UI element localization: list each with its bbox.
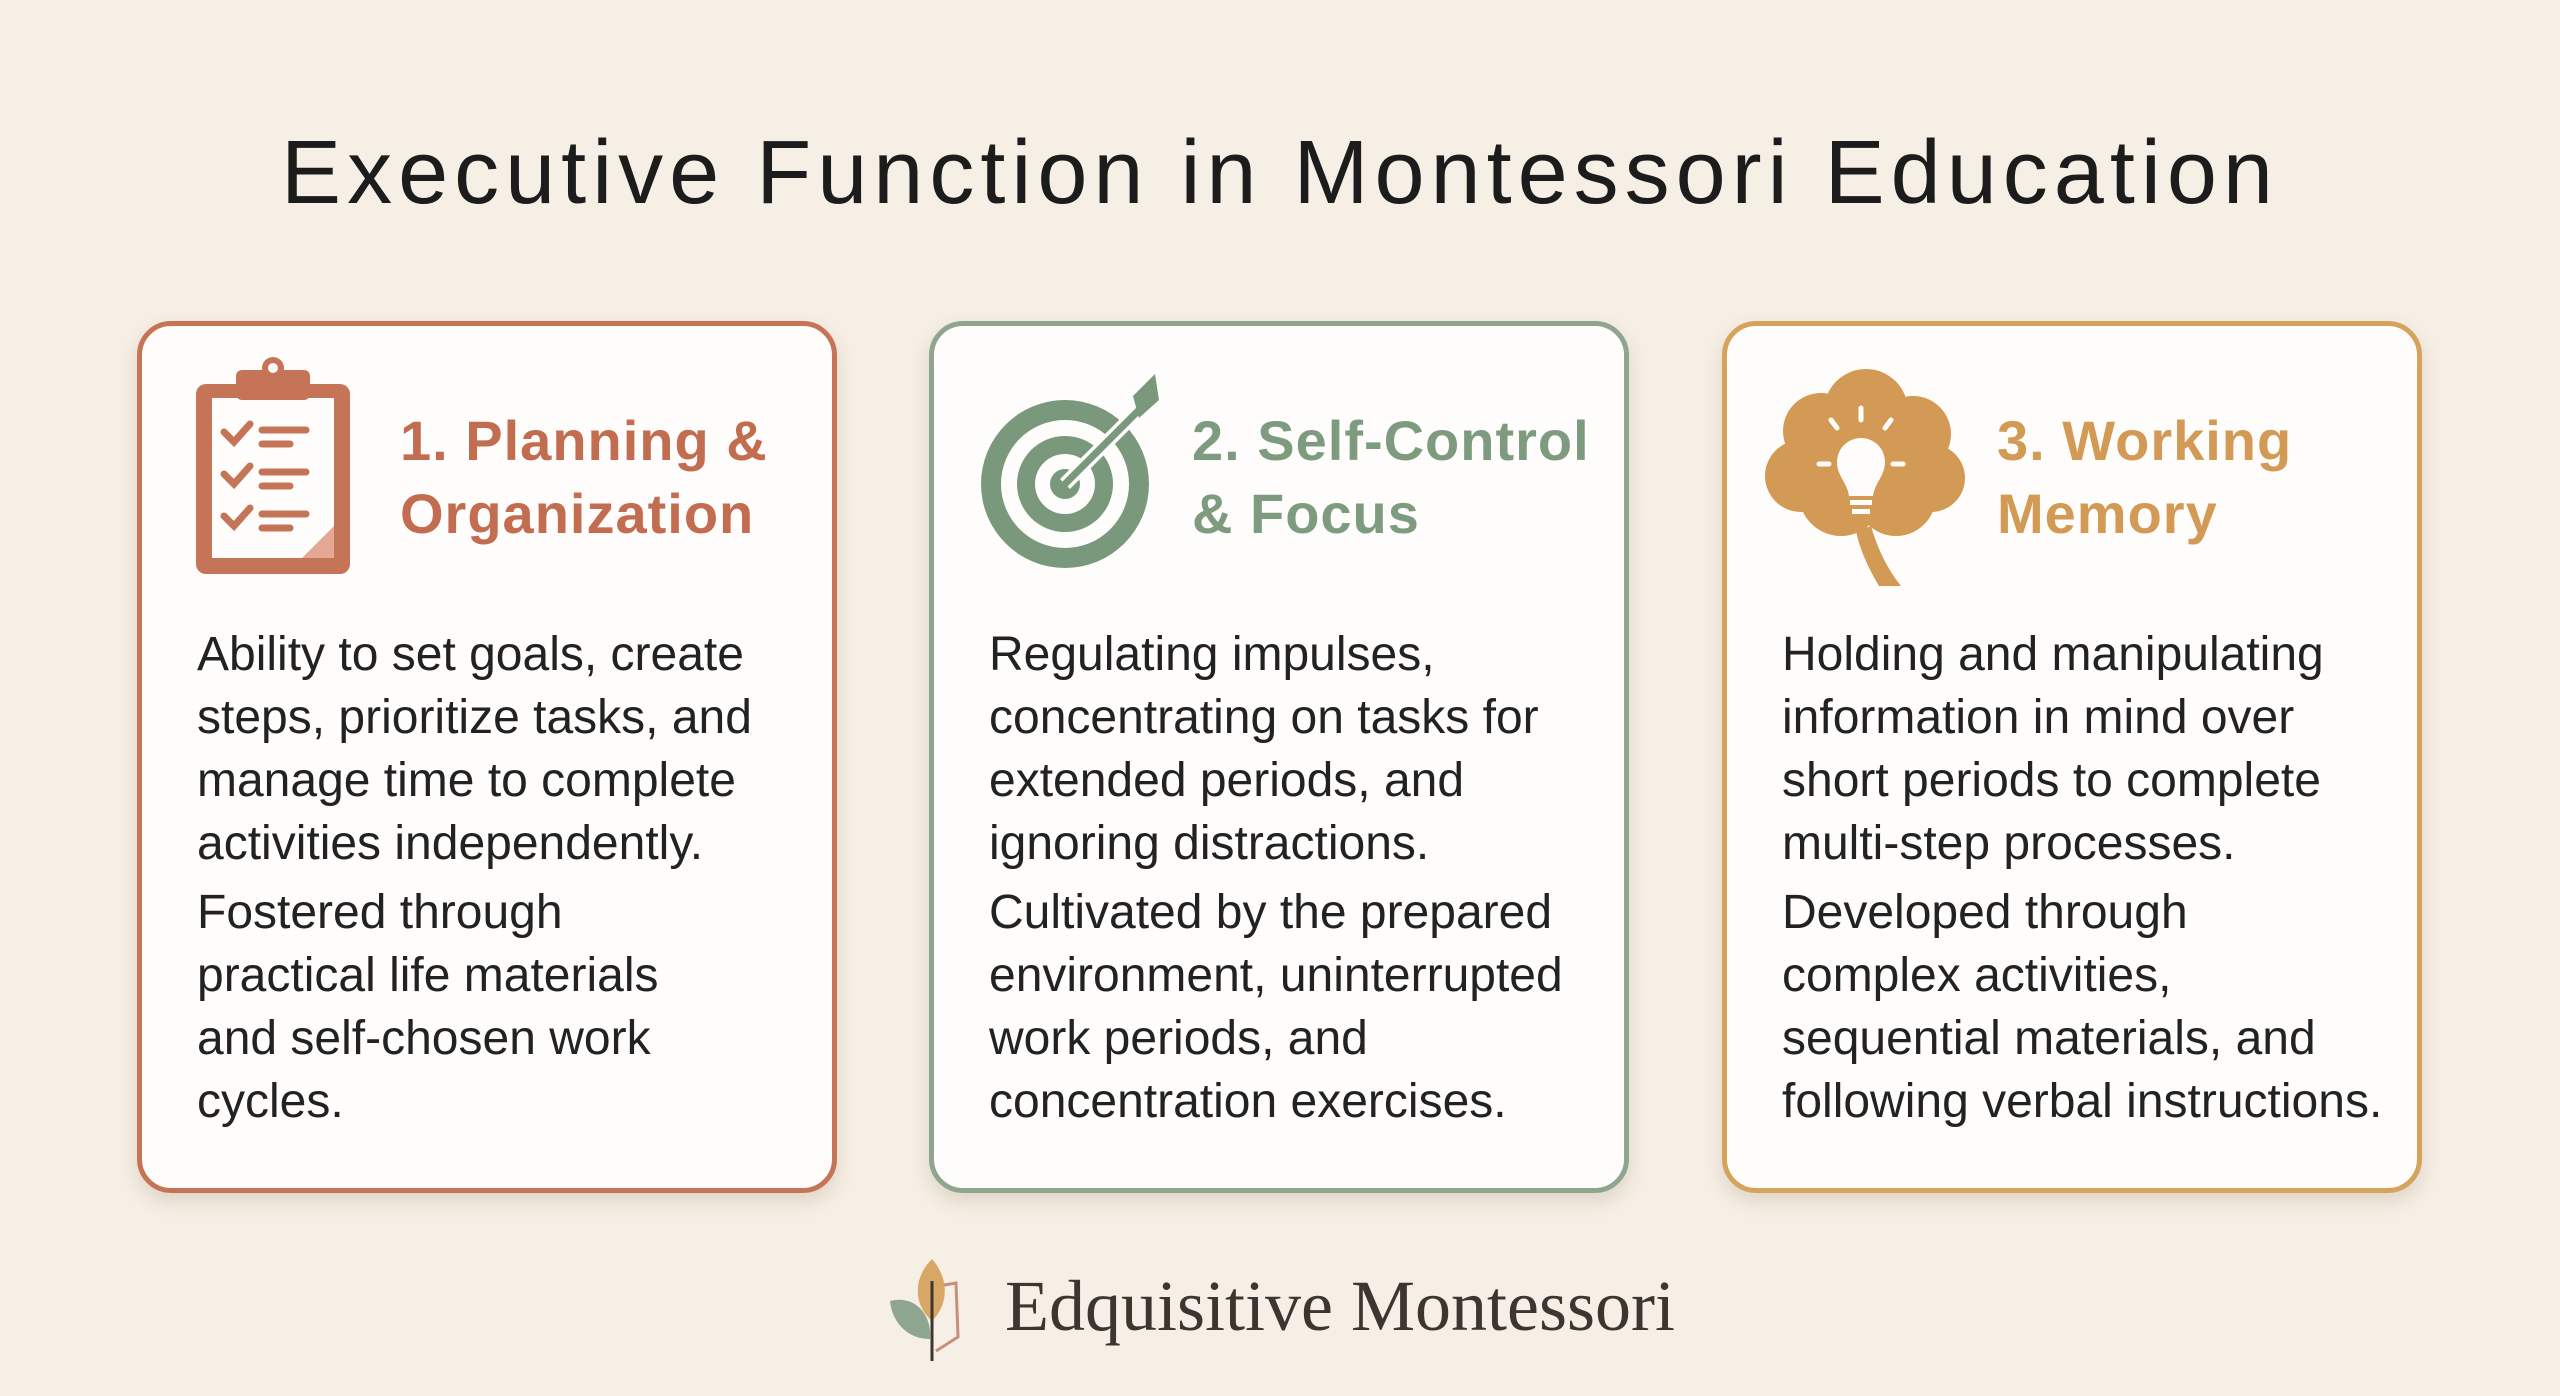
text block: environment, uninterrupted — [989, 949, 1563, 1002]
heading: & Focus — [1192, 482, 1420, 545]
text block: activities independently. — [197, 817, 703, 870]
text block: work periods, and — [989, 1012, 1368, 1065]
heading — [1997, 409, 2292, 545]
text block: multi-step processes. — [1782, 817, 2236, 870]
text block: short periods to complete — [1782, 754, 2321, 807]
text block: extended periods, and — [989, 754, 1464, 807]
heading: Organization — [400, 482, 754, 545]
title: Executive Function in Montessori Education — [281, 123, 2279, 223]
heading: 1. Planning & — [400, 409, 768, 472]
text block: cycles. — [197, 1075, 344, 1128]
text block: Holding and manipulating — [1782, 628, 2324, 681]
text block: Fostered through — [197, 886, 563, 939]
heading: 3. Working — [1997, 409, 2292, 472]
heading — [1192, 409, 1590, 545]
text block: following verbal instructions. — [1782, 1075, 2382, 1128]
heading — [400, 409, 768, 545]
heading: Memory — [1997, 482, 2218, 545]
icon: logo leaf and book — [890, 1259, 960, 1361]
text block — [989, 628, 1563, 1128]
text block: information in mind over — [1782, 691, 2294, 744]
text block: Cultivated by the prepared — [989, 886, 1552, 939]
text block: ignoring distractions. — [989, 817, 1429, 870]
panel: working memory — [1722, 321, 2422, 1193]
text block: Developed through — [1782, 886, 2188, 939]
text block: practical life materials — [197, 949, 658, 1002]
text block: Regulating impulses, — [989, 628, 1435, 681]
footer brand: Edquisitive Montessori — [1005, 1266, 1675, 1346]
text block — [197, 628, 752, 1128]
text block: concentration exercises. — [989, 1075, 1507, 1128]
panel: self-control & focus — [929, 321, 1629, 1193]
panel: planning & organization — [137, 321, 837, 1193]
heading: 2. Self-Control — [1192, 409, 1590, 472]
text block: steps, prioritize tasks, and — [197, 691, 752, 744]
icon: brain with lightbulb — [1765, 369, 1965, 586]
text block: complex activities, — [1782, 949, 2171, 1002]
icon: target — [981, 374, 1159, 568]
text block: Ability to set goals, create — [197, 628, 744, 681]
text block: and self-chosen work — [197, 1012, 651, 1065]
text block — [1782, 628, 2382, 1128]
text block: manage time to complete — [197, 754, 736, 807]
text block: concentrating on tasks for — [989, 691, 1539, 744]
icon: clipboard — [196, 357, 350, 574]
text block: sequential materials, and — [1782, 1012, 2316, 1065]
